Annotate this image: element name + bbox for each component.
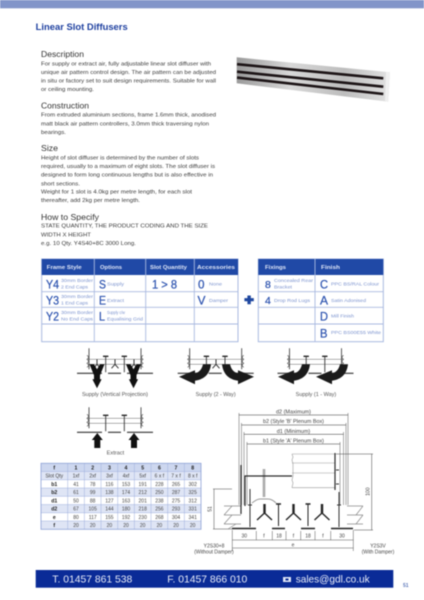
dimension table: 201 [139,498,147,504]
damper box [292,454,336,488]
section: size: short sections. [41,181,80,187]
product code table: frame, options, slots, accessories: Frame Style [47,265,82,271]
section: construction: Construction [41,100,89,110]
dimension table: f [53,523,55,529]
dimension table: 116 [105,482,114,488]
dimension table: 99 [90,490,96,496]
section: how to specify: WIDTH X HEIGHT [41,232,91,238]
section: size: Height of slot diffuser is determined by the number of slots [41,155,199,161]
product code table: fixings and finish: PPC BS00E55 White [331,330,381,336]
product code table: frame, options, slots, accessories: Accessories [197,265,235,271]
dimension table: f [53,465,55,471]
product code table: frame, options, slots, accessories: None [209,282,222,288]
bottom dimensions: 18 [276,534,282,540]
dimension table: 1xf [73,474,80,480]
dimension table [41,463,201,529]
product code table: frame, options, slots, accessories: 1 End Caps [61,300,89,306]
section: description: Description [41,49,84,59]
product code table: frame, options, slots, accessories: Y2 [46,310,59,324]
dimension table: 7 x f [171,474,181,480]
section: size [41,143,215,204]
section: construction [41,100,216,136]
dimension table: 6 [158,465,161,471]
product code table: frame, options, slots, accessories: 30mm Border [61,294,93,300]
page number: 51 [403,583,409,589]
product code table: fixings and finish: Satin Adonised [331,298,366,304]
dimension table: 20 [140,523,146,529]
section: how to specify: STATE QUANTITY, THE PRODUCT CODING AND THE SIZE [41,224,208,230]
dimension table: 50 [73,498,79,504]
caption: without damper [194,544,234,556]
dimension table: 312 [189,498,197,504]
section: how to specify: How to Specify [41,212,100,222]
left dimension 51: 51 [208,506,214,512]
section: size: Weight for 1 slot is 4.0kg per metre length, for each slot [41,190,192,196]
section: construction: From extruded aluminium sections, frame 1.6mm thick, anodised [41,113,216,119]
right dimension 100: 100 [366,487,372,496]
dimension table: 302 [189,482,197,488]
footer contact bar: T. 01457 861 538 [52,574,133,586]
product code table: frame, options, slots, accessories: Extract [107,298,125,304]
dimension table: 265 [172,482,180,488]
side fixings [248,470,341,527]
icon: envelope [283,577,291,582]
top dimension lines: d2 (Maximum) [276,410,311,416]
diagram: supply 1-way: Supply (1 - Way) [296,392,336,398]
product code table: fixings and finish: 4 [265,295,271,307]
dimension table: 4xf [123,474,130,480]
ceiling hatching [224,506,363,529]
product code table: frame, options, slots, accessories [42,259,238,342]
dimension table: 88 [90,498,96,504]
dimension table: 4 [125,465,128,471]
dimension table: 20 [190,523,196,529]
bottom dimensions: f [322,534,324,540]
dimension table: 2xf [89,474,97,480]
footer contact bar: F. 01457 866 010 [167,574,248,586]
product code table: frame, options, slots, accessories: Supply [107,282,125,288]
dimension table: 5 [141,465,144,471]
dimension table: 228 [155,482,164,488]
product code table: frame, options, slots, accessories: L [99,310,105,324]
dimension table: 218 [139,506,147,512]
dimension table: 138 [105,490,114,496]
product code table: fixings and finish [258,259,383,342]
dimension table: 191 [139,482,147,488]
product code table: frame, options, slots, accessories: 1 > 8 [152,278,177,292]
header band [0,0,424,8]
bottom dimensions: f [263,534,265,540]
dimension table: 155 [105,515,114,521]
product code table: frame, options, slots, accessories: No End Caps [61,316,94,322]
product code table: fixings and finish: D [320,310,328,324]
dimension table: e [53,515,56,521]
section: description: or ceiling mounting. [41,87,94,93]
dimension table: 7 [175,465,178,471]
dimension table: 250 [155,490,164,496]
product code table: frame, options, slots, accessories: Damper [209,298,228,304]
product code table: fixings and finish: 8 [265,279,271,291]
product code table: fixings and finish: Drop Rod Lugs [274,298,311,304]
dimension table: 325 [189,490,197,496]
bottom dimensions: 30 [339,534,345,540]
dimension table: 256 [155,506,164,512]
dimension table: 20 [90,523,96,529]
title: Linear Slot Diffusers [36,22,128,32]
left dimension 51 [208,489,232,529]
dimension table: 174 [122,490,130,496]
product code table: frame, options, slots, accessories: E [99,294,106,308]
dimension table: 238 [155,498,164,504]
dimension table: 144 [105,506,114,512]
product code table: frame, options, slots, accessories: 0 [198,278,205,292]
top dimension lines: b1 (Style 'A' Plenum Box) [263,438,324,444]
caption: without damper: (Without Damper) [194,550,234,556]
dimension table: 20 [157,523,162,529]
product photo: linear slot diffuser [237,57,390,102]
section: how to specify: e.g. 10 Qty. Y4S40+8C 3000 Long. [41,241,136,247]
diagram: supply 2-way [178,348,254,398]
dimension table: 3xf [106,474,113,480]
dimension table: b2 [51,490,57,496]
product code table: frame, options, slots, accessories: Equalising Grid [107,316,143,322]
dimension table: 153 [122,482,130,488]
dimension table: 20 [73,523,79,529]
dimension table: 8 x f [188,474,198,480]
caption: with damper [362,544,395,556]
product code table: fixings and finish: Bracket [274,284,293,290]
dimension table: 20 [173,523,179,529]
dimension table: d1 [51,498,57,504]
bottom dimensions: 30 [242,534,247,540]
icon: plus [244,296,254,304]
diagram: supply 1-way [278,348,354,398]
dimension table: 6 x f [155,474,165,480]
product code table: fixings and finish: Concealed Rear [274,278,313,284]
slot blades [257,504,330,526]
section: size: designed to form long continuous lengths but is also effective in [41,173,213,179]
dimension table: 304 [172,515,180,521]
diagram: extract [77,407,153,456]
section: how to specify [41,212,208,247]
dimension table: 275 [172,498,180,504]
dimension table: Slot Qty [45,474,64,480]
diagram: supply 2-way: Supply (2 - Way) [196,392,236,398]
dimension table: 1 [75,465,78,471]
diagram: extract: Extract [107,450,125,456]
section: construction: bearings. [41,130,66,136]
section: description [41,49,216,93]
product code table: fixings and finish: B [320,326,328,340]
dimension table: 2 [91,465,94,471]
product code table: frame, options, slots, accessories: Slot Quantity [150,265,187,271]
section: size: thereafter, add 2kg per metre length. [41,198,140,204]
diagram: supply vertical projection: Supply (Vertical Projection) [82,392,148,398]
section: size: Size [41,143,58,153]
product code table: frame, options, slots, accessories: Supply c/w [107,310,125,316]
dimension table: 293 [172,506,180,512]
dimension table: 268 [155,515,164,521]
product code table: frame, options, slots, accessories: 30mm Border [61,278,93,284]
section drawing with dimensions [194,410,395,556]
product code table: frame, options, slots, accessories: V [198,294,206,308]
section: description: For supply or extract air, fully adjustable linear slot diffuser with [41,61,211,67]
dimension table: 341 [189,515,197,521]
product code table: frame, options, slots, accessories: S [99,278,106,292]
section: size: required, usually to a maximum of eight slots. The slot diffuser is [41,164,215,170]
dimension table: 67 [73,506,79,512]
dimension table: 127 [105,498,114,504]
top dimension lines [239,410,348,444]
dimension table: 163 [122,498,130,504]
product code table: fixings and finish: C [320,278,328,292]
dimension table: 105 [89,506,97,512]
product code table: fixings and finish: Fixings [265,265,286,271]
bottom dimensions [232,530,353,551]
dimension table: 8 [191,465,194,471]
product code table: fixings and finish: PPC BS/RAL Colour [331,282,379,288]
face plates [232,528,353,530]
dimension table: 20 [107,523,112,529]
product code table: fixings and finish: A [320,294,328,308]
product code table: fixings and finish: Finish [321,265,340,271]
section: construction: matt black air pattern controllers, 3.0mm thick traversing nylon [41,121,209,127]
dimension table: b1 [51,482,57,488]
dimension table: 20 [123,523,129,529]
product code table: frame, options, slots, accessories: 2 End Caps [61,284,89,290]
bottom dimensions: 18 [305,534,311,540]
product code table: frame, options, slots, accessories: 30mm Border [61,310,93,316]
product code table: fixings and finish: Mill Finish [331,314,354,320]
product code table: frame, options, slots, accessories: Y4 [46,278,59,292]
right dimension 100 [336,454,373,530]
dimension table: 78 [90,482,96,488]
dimension table: 212 [139,490,147,496]
dimension table: 192 [122,515,130,521]
plenum side walls and dimension extension lines [239,413,348,505]
dimension table: 230 [139,515,147,521]
product code table: frame, options, slots, accessories: Options [100,265,122,271]
bottom dimensions: f [293,534,295,540]
damper bracket thick lines [241,453,335,514]
top dimension lines: b2 (Style 'B' Plenum Box) [263,419,324,425]
caption: with damper: Y2S3V [370,544,386,550]
dimension table: 5xf [139,474,147,480]
bottom dimensions: e [292,542,295,548]
top dimension lines: d1 (Minimum) [277,429,311,435]
footer contact bar: sales@gdl.co.uk [296,574,370,586]
product code table: frame, options, slots, accessories: Y3 [46,294,59,308]
dimension table: 41 [73,482,79,488]
section: description: unique air pattern control design. The air pattern can be adjusted [41,70,216,76]
dimension table: 287 [172,490,180,496]
damper spindle [263,469,265,497]
dimension table: 61 [73,490,79,496]
dimension table: 180 [122,506,130,512]
diagram: supply vertical projection [77,348,153,398]
section: description: in situ or factory set to suit design requirements. Suitable for wall [41,78,216,84]
footer contact bar [36,570,393,588]
caption: with damper: (With Damper) [362,550,395,556]
dimension table: 331 [189,506,197,512]
dimension table: 3 [108,465,111,471]
dimension table: d2 [51,506,57,512]
dimension table: 80 [73,515,79,521]
caption: without damper: Y2S30+8 [204,544,225,550]
dimension table: 117 [89,515,97,521]
